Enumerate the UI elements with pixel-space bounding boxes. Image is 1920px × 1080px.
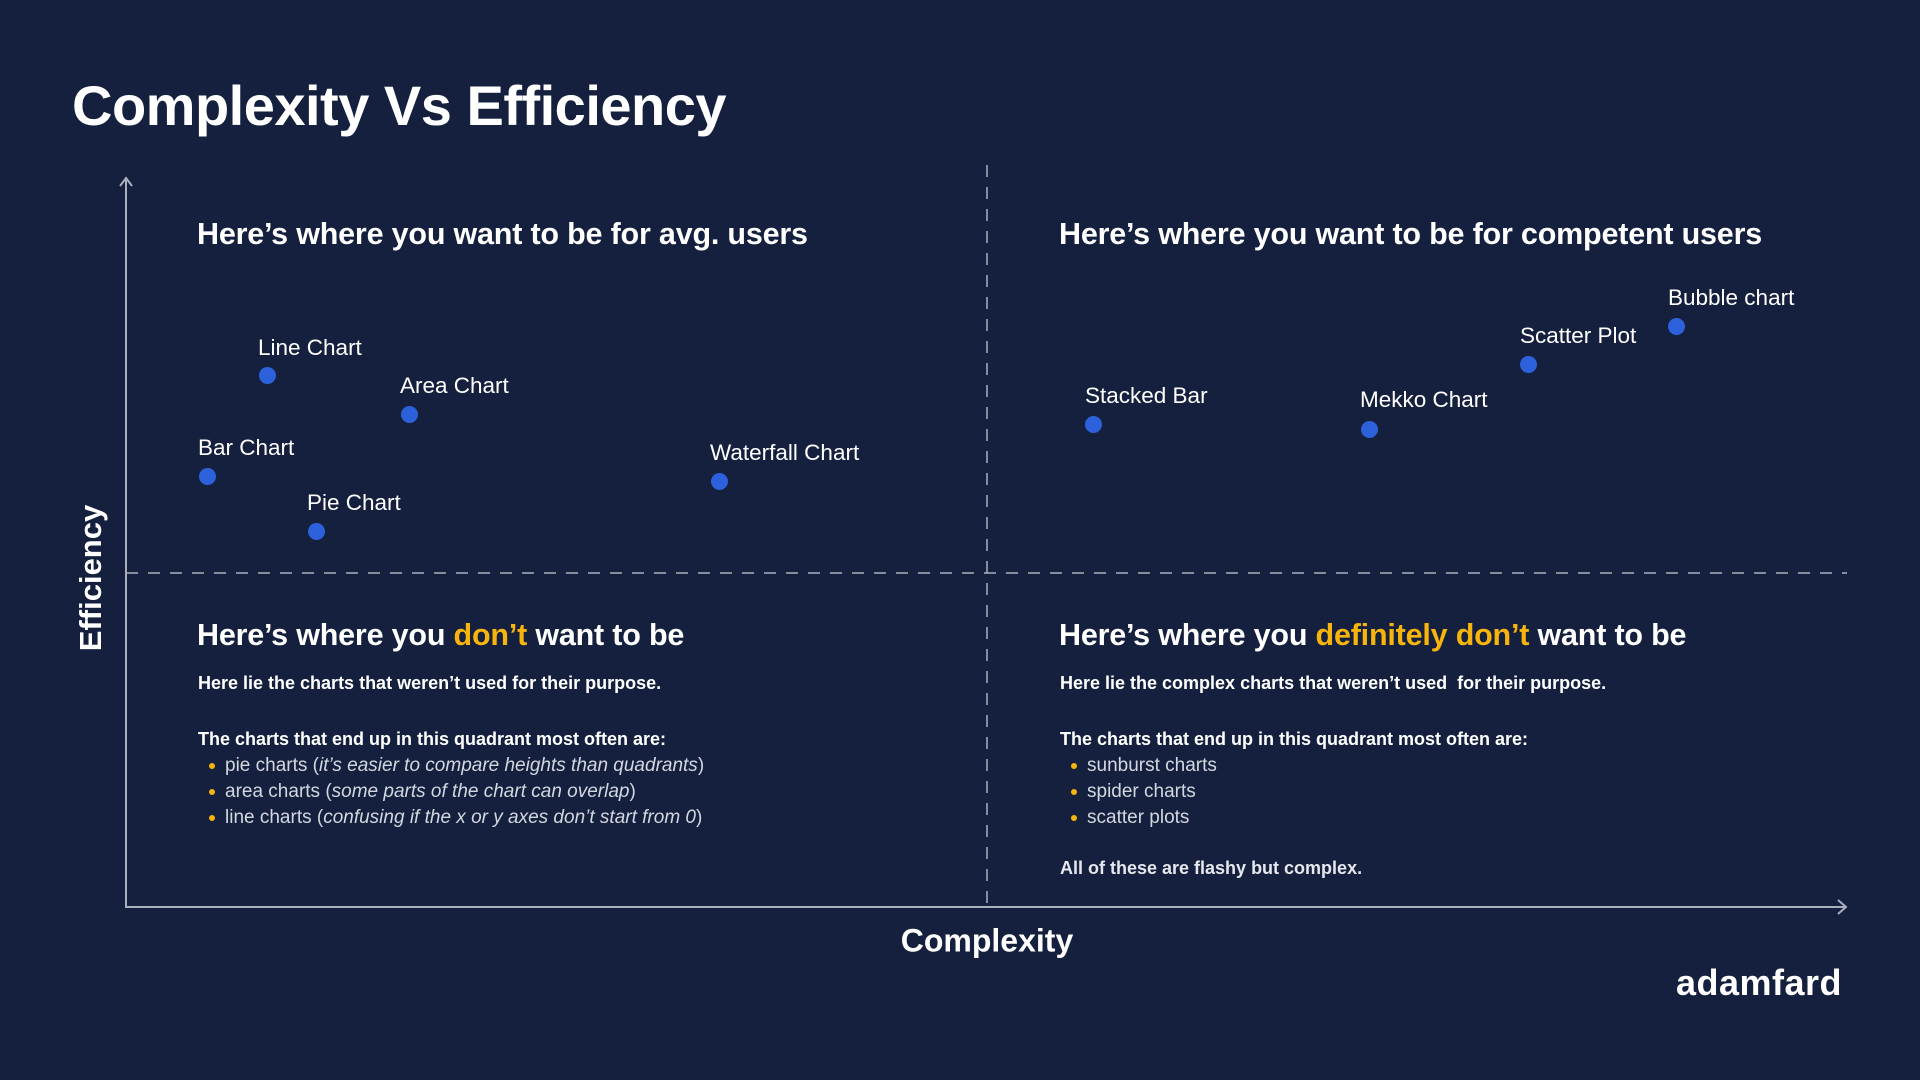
scatter points top-left xyxy=(198,335,860,540)
scatter points top-right: Bubble chart xyxy=(1668,285,1794,310)
point: scatter plot xyxy=(1520,323,1636,373)
quadrant heading: competent users: Here’s where you want to be for competent users xyxy=(1059,217,1762,251)
list: scatter plots xyxy=(1087,807,1189,828)
point: stacked bar xyxy=(1085,383,1208,433)
scatter points top-right: Stacked Bar xyxy=(1085,383,1208,408)
list: spider charts xyxy=(1087,781,1196,802)
closing note: All of these are flashy but complex. xyxy=(1060,858,1362,878)
scatter points top-right: Scatter Plot xyxy=(1520,323,1636,348)
point: mekko chart xyxy=(1360,387,1488,438)
description: Here lie the complex charts that weren’t used for their purpose. xyxy=(1060,673,1606,693)
description: Here lie the charts that weren’t used for their purpose. xyxy=(198,673,661,693)
axis label: efficiency: Efficiency xyxy=(73,505,108,651)
point: area chart xyxy=(400,373,509,423)
list xyxy=(198,729,704,828)
point: bar chart xyxy=(198,435,294,485)
list: The charts that end up in this quadrant most often are: xyxy=(198,729,666,749)
quadrant: don't want to be xyxy=(197,618,704,828)
point: pie chart xyxy=(307,490,401,540)
heading: Here’s where you definitely don’t want to be xyxy=(1059,618,1686,652)
scatter points top-right: Mekko Chart xyxy=(1360,387,1488,412)
scatter points top-left: Pie Chart xyxy=(307,490,401,515)
scatter points top-left: Waterfall Chart xyxy=(710,440,859,465)
scatter points top-left: Line Chart xyxy=(258,335,362,360)
list: sunburst charts xyxy=(1087,755,1217,776)
title: Complexity Vs Efficiency xyxy=(72,74,726,137)
point: waterfall chart xyxy=(710,440,860,490)
quadrant: definitely don't want to be xyxy=(1059,618,1686,878)
list: area charts (some parts of the chart can overlap) xyxy=(225,781,636,802)
logo: adamfard: adamfard xyxy=(1676,962,1842,1003)
heading: Here’s where you don’t want to be xyxy=(197,618,684,652)
scatter points top-right xyxy=(1085,285,1794,438)
scatter points top-left: Area Chart xyxy=(400,373,509,398)
list: The charts that end up in this quadrant most often are: xyxy=(1060,729,1528,749)
quadrant heading: avg users: Here’s where you want to be for avg. users xyxy=(197,217,808,251)
scatter points top-left: Bar Chart xyxy=(198,435,294,460)
point: line chart xyxy=(258,335,362,384)
list xyxy=(1060,729,1528,828)
point: bubble chart xyxy=(1668,285,1794,335)
list: pie charts (it’s easier to compare heights than quadrants) xyxy=(225,755,704,776)
axis label: complexity: Complexity xyxy=(901,922,1073,958)
list: line charts (confusing if the x or y axes don’t start from 0) xyxy=(225,807,702,828)
